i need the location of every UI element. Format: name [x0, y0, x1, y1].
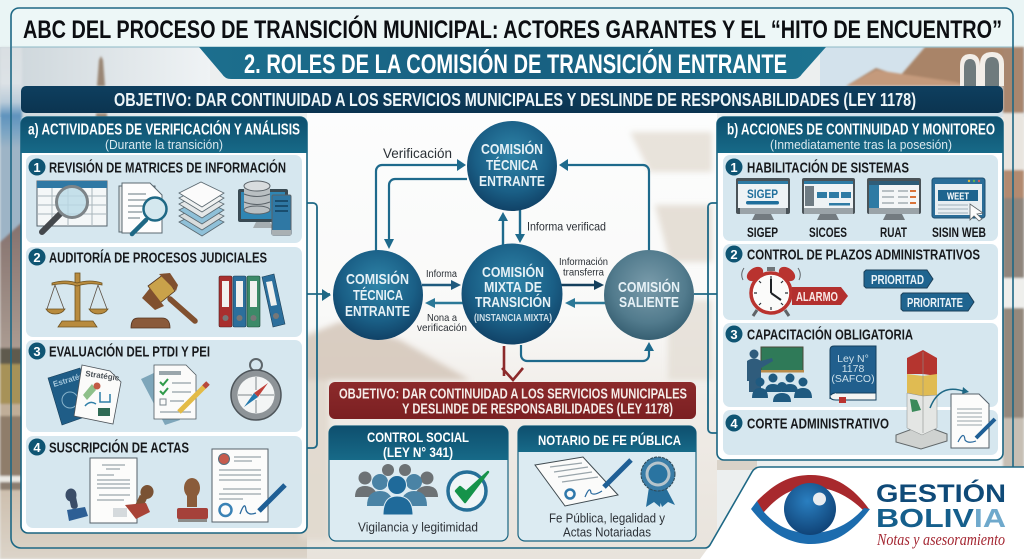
node: joint commission: MIXTA DE: [484, 279, 542, 296]
arrow: red to objective: [502, 346, 523, 380]
panel: social control: [329, 426, 508, 541]
icon: check mark: [448, 472, 488, 510]
card 2: administrative deadlines: [723, 244, 998, 320]
tag: PRIORITATE: PRIORITATE: [907, 295, 963, 310]
subtitle text: 2. ROLES DE LA COMISIÓN DE TRANSICIÓN ENTRANTE: [244, 48, 787, 79]
icon: strategic plan documents: Stratégic: [85, 369, 120, 383]
icon: RUAT monitor: [867, 178, 921, 220]
caption: vigilance: Vigilancia y legitimidad: [358, 520, 478, 534]
node: outgoing commission: COMISIÓN: [618, 278, 680, 296]
icon: table with magnifier: [37, 181, 107, 232]
icon: rosette: [641, 457, 675, 507]
objective bar: [21, 86, 1003, 113]
panel: a) verification and analysis: [21, 117, 307, 533]
label: SIGEP: SIGEP: [747, 225, 778, 240]
label: Verificación: Verificación: [383, 145, 452, 161]
header: notario: NOTARIO DE FE PÚBLICA: [538, 431, 681, 448]
node: joint commission: COMISIÓN: [482, 263, 544, 281]
label: Información transferra: Información: [559, 256, 608, 268]
arrow: verification loop: [376, 159, 466, 251]
icon: stamp and signed act: [177, 449, 285, 522]
icon: paper stack: [179, 182, 224, 236]
node: top commission: COMISIÓN: [481, 140, 543, 158]
icon: strategic plan documents: [48, 365, 121, 425]
heading 3: CAPACITACIÓN OBLIGATORIA: [747, 326, 913, 344]
panel b header: [717, 117, 1003, 153]
label: SISIN WEB: SISIN WEB: [932, 225, 986, 240]
arrow: middle to left: [425, 298, 463, 308]
church windows: [960, 52, 1004, 86]
number 1: 1: [730, 160, 738, 175]
number 4: 4: [730, 416, 738, 431]
node: left commission: ENTRANTE: [345, 303, 410, 320]
icon: classroom: [747, 347, 812, 402]
label: RUAT: RUAT: [880, 225, 908, 240]
icon: signed document: [951, 394, 995, 448]
number 2: [28, 248, 46, 266]
heading 4: SUSCRIPCIÓN DE ACTAS: [49, 438, 189, 456]
logo: Gestión Bolivia: [751, 475, 1006, 549]
number 4: 4: [33, 440, 41, 455]
tower: [96, 56, 107, 119]
node: joint commission: [462, 244, 562, 344]
number 1: 1: [33, 160, 41, 175]
icon: strategic plan documents: Estratégic: [52, 369, 92, 389]
caption: public faith: Fe Pública, legalidad y: [549, 510, 665, 526]
icon: boundary marker: [896, 350, 969, 449]
card 4: signing of minutes: [26, 436, 302, 528]
number 1: [726, 158, 742, 176]
node: left commission: [333, 250, 423, 340]
panel b header: (Inmediatamente tras la posesión): [770, 137, 952, 152]
icon: alarm clock: [742, 264, 800, 316]
callout: red objective: [329, 382, 696, 419]
number 2: [726, 246, 742, 262]
label: Informa: Informa: [426, 269, 457, 280]
label: Información transferra: [559, 256, 608, 278]
label: Nona a verificación: [417, 312, 467, 334]
heading 1: REVISIÓN DE MATRICES DE INFORMACIÓN: [49, 158, 286, 176]
arrow: middle to outgoing, bottom: [521, 342, 654, 361]
bracket connectors: [307, 203, 717, 448]
icon: eye: [751, 475, 870, 544]
number 2: 2: [730, 247, 738, 262]
tag: PRIORITAD: [864, 270, 933, 288]
number 3: 3: [33, 344, 41, 359]
caption: public faith: Actas Notariadas: [563, 524, 651, 540]
caption: public faith: [549, 510, 665, 540]
panel: notary: [518, 426, 696, 541]
tag: PRIORITATE: [901, 293, 974, 311]
icon: SIGEP monitor: SIGEP: [747, 189, 778, 201]
heading 3: EVALUACIÓN DEL PTDI Y PEI: [49, 342, 210, 360]
callout: red objective: Y DESLINDE DE RESPONSABILIDADES (LEY 1178): [402, 400, 673, 418]
node: outgoing commission: [604, 250, 694, 340]
subtitle ribbon: [199, 47, 826, 79]
icon: document with stamps: [66, 458, 156, 523]
node: top commission: ENTRANTE: [479, 173, 545, 190]
arrow: top to middle: [515, 210, 525, 243]
icon: notarised document and pen: [535, 457, 631, 506]
node: left commission: TÉCNICA: [353, 287, 403, 304]
centre haze: [307, 113, 717, 559]
number 4: [726, 414, 742, 432]
number 4: [28, 438, 46, 456]
card 1: revision of matrices: [26, 155, 302, 243]
number 1: [28, 158, 46, 176]
icon: SISIN WEB window: [932, 178, 985, 221]
arrow: middle to outgoing: [561, 280, 604, 290]
icon: SICOES monitor: [802, 178, 855, 220]
icon: group of people: [355, 464, 438, 515]
node: top commission: TÉCNICA: [486, 157, 538, 174]
node: joint commission: TRANSICIÓN: [475, 293, 551, 311]
arrow: left panel to diagram: [322, 289, 331, 301]
icon: law book: (SAFCO): [831, 373, 875, 385]
heading 2: AUDITORÍA DE PROCESOS JUDICIALES: [49, 250, 267, 266]
label: SICOES: SICOES: [809, 225, 847, 240]
icon: binders: [219, 274, 285, 327]
icon: checklist and pencil: [141, 365, 208, 425]
panel: b) continuity and monitoring: [717, 117, 1003, 460]
card 4: administrative cut-off: [723, 410, 998, 455]
heading 1: HABILITACIÓN DE SISTEMAS: [747, 158, 909, 176]
header: control social: [329, 426, 508, 460]
callout: red objective: OBJETIVO: DAR CONTINUIDAD A LOS SERVICIOS MUNICIPALES: [339, 386, 687, 402]
icon: document with magnifier: [119, 183, 166, 234]
arrow: outgoing to middle: [565, 298, 606, 308]
card 3: mandatory training: [723, 323, 998, 407]
card 2: audit of judicial processes: [26, 247, 302, 337]
tag: PRIORITAD: PRIORITAD: [871, 272, 924, 287]
icon: compass: [231, 359, 281, 420]
node: top commission: [467, 121, 557, 211]
node: outgoing commission: SALIENTE: [619, 294, 679, 311]
number 3: [726, 326, 742, 342]
header: control social: (LEY N° 341): [383, 444, 453, 460]
icon: law book: 1178: [842, 363, 864, 375]
node: joint commission: (INSTANCIA MIXTA): [474, 313, 552, 324]
number 3: 3: [730, 327, 738, 342]
header: control social: CONTROL SOCIAL: [367, 429, 469, 445]
panel a header: (Durante la transición): [105, 137, 223, 152]
card 1: enabling systems: [723, 155, 998, 241]
label: Informa verificad: Informa verificad: [527, 220, 606, 234]
label: Información transferra: transferra: [563, 266, 604, 278]
wordmark: GESTIÓN: GESTIÓN: [876, 478, 1006, 508]
panel a header: [21, 117, 307, 153]
diagram: commission flow: [333, 121, 694, 380]
card 3: PTDI and PEI evaluation: [26, 340, 302, 432]
arrow: top to left: [384, 179, 467, 249]
icon: scales of justice: [46, 273, 108, 327]
header: notario: [518, 426, 696, 452]
arrow: middle to top: [498, 212, 508, 246]
panel a header: a) ACTIVIDADES DE VERIFICACIÓN Y ANÁLISIS: [28, 120, 300, 138]
label: Nona a verificación: Nona a: [427, 312, 457, 324]
icon: SISIN WEB window: WEET: [947, 192, 969, 202]
wordmark: BOLIVIA: BOLIV IA: [876, 503, 1006, 533]
icon: computer and database: [238, 181, 291, 235]
arrow: outgoing to top: [559, 159, 649, 251]
label: Nona a verificación: verificación: [417, 322, 467, 334]
icon: law book: Ley N°: [837, 353, 869, 365]
title band: [12, 9, 1012, 47]
number 3: [28, 342, 46, 360]
logo background: [700, 467, 1024, 559]
node: left commission: COMISIÓN: [346, 270, 409, 288]
number 2: 2: [33, 250, 41, 265]
tag: ALARMO: ALARMO: [796, 289, 838, 304]
arrow: left to middle: [422, 280, 461, 290]
heading 4: CORTE ADMINISTRATIVO: [747, 416, 889, 432]
icon: gavel: [131, 273, 195, 328]
icon: SIGEP monitor: [736, 178, 790, 220]
icon: law book: [830, 346, 876, 403]
